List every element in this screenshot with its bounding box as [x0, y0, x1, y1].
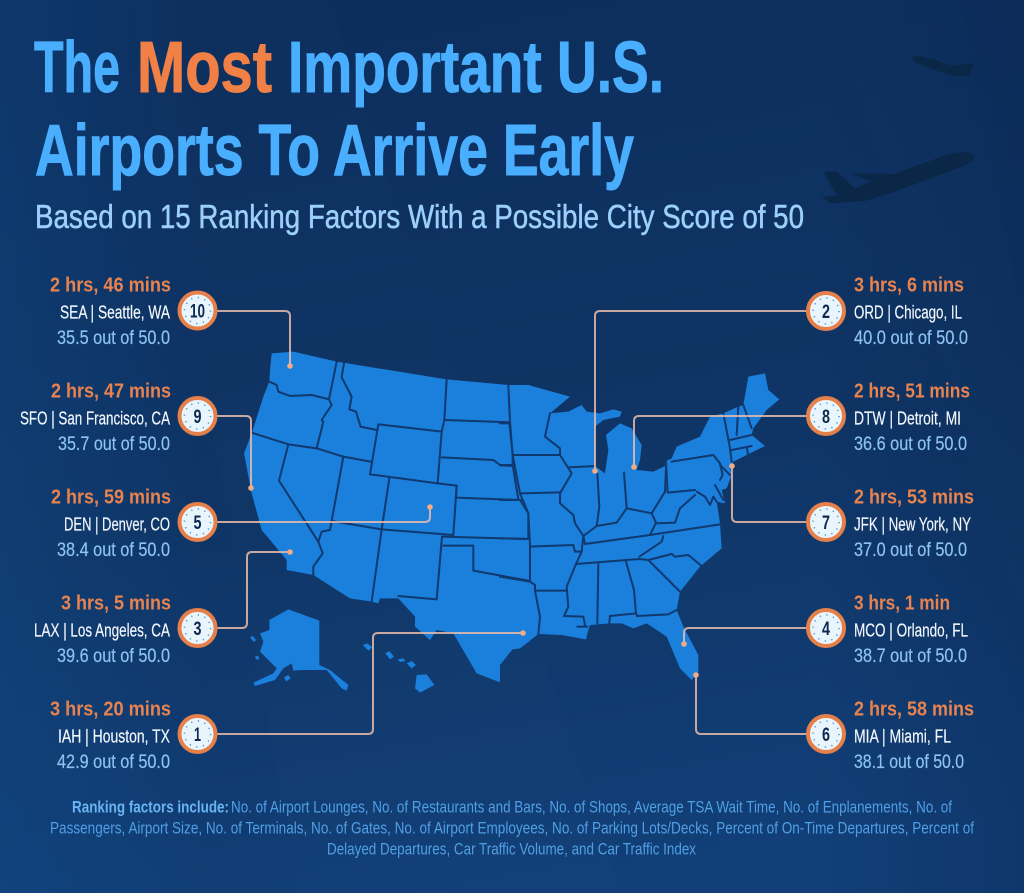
- callout: rank 2 Chicago: [592, 274, 968, 474]
- callout: rank 4 Orlando: 3 hrs, 1 min: [854, 592, 950, 614]
- callout: rank 6 Miami: MIA | Miami, FL: [854, 726, 951, 746]
- callout: rank 8 Detroit: DTW | Detroit, MI: [854, 408, 961, 428]
- callout: rank 8 Detroit: 2 hrs, 51 mins: [854, 380, 970, 402]
- callout: rank 4 Orlando: [681, 592, 968, 667]
- callout: rank 6 Miami: [693, 672, 974, 773]
- callout: rank 1 Houston: 42.9 out of 50.0: [57, 752, 170, 773]
- callout: rank 6 Miami: 2 hrs, 58 mins: [854, 698, 974, 720]
- callout: rank 1 Houston: 1: [194, 725, 201, 746]
- callout: rank 9 San Francisco: 2 hrs, 47 mins: [51, 380, 171, 402]
- callout: rank 8 Detroit: [631, 380, 970, 470]
- callout: rank 7 New York: 37.0 out of 50.0: [854, 540, 967, 561]
- callout: rank 1 Houston: [50, 630, 526, 773]
- title: Important U.S.: [288, 28, 664, 108]
- callout: rank 9 San Francisco: 35.7 out of 50.0: [58, 434, 170, 455]
- footer: ranking factors note: [50, 798, 974, 858]
- callout: rank 4 Orlando: 38.7 out of 50.0: [854, 646, 967, 667]
- callout: rank 10 Seattle: 35.5 out of 50.0: [57, 328, 170, 349]
- callout: rank 7 New York: [729, 463, 974, 561]
- callout: rank 5 Denver: DEN | Denver, CO: [64, 514, 170, 534]
- callout: rank 3 Los Angeles: LAX | Los Angeles, CA: [34, 620, 170, 640]
- callout: rank 10 Seattle: SEA | Seattle, WA: [60, 302, 170, 322]
- callout: rank 3 Los Angeles: 3: [194, 619, 202, 640]
- hawaii: [363, 643, 434, 693]
- callout: rank 5 Denver: [51, 486, 433, 561]
- title: Airports To Arrive Early: [35, 111, 634, 191]
- callout: rank 4 Orlando: MCO | Orlando, FL: [854, 620, 968, 640]
- callout: rank 3 Los Angeles: [34, 549, 293, 667]
- callout: rank 5 Denver: 2 hrs, 59 mins: [51, 486, 171, 508]
- icon: small airplane silhouette: [912, 56, 974, 76]
- callout: rank 2 Chicago: ORD | Chicago, IL: [854, 302, 962, 322]
- subtitle: Based on 15 Ranking Factors With a Possible City Score of 50: [35, 198, 804, 235]
- callout: rank 4 Orlando: 4: [822, 619, 830, 640]
- title: [34, 28, 664, 191]
- callout: rank 3 Los Angeles: 39.6 out of 50.0: [57, 646, 170, 667]
- alaska: [250, 609, 348, 691]
- footer: ranking factors note: Ranking factors include:: [72, 798, 229, 816]
- callout: rank 2 Chicago: 40.0 out of 50.0: [854, 328, 968, 349]
- callout: rank 1 Houston: IAH | Houston, TX: [58, 726, 170, 746]
- callout: rank 10 Seattle: [50, 274, 293, 369]
- callout: rank 7 New York: 2 hrs, 53 mins: [854, 486, 974, 508]
- callout: rank 6 Miami: 38.1 out of 50.0: [854, 752, 964, 773]
- callout: rank 9 San Francisco: SFO | San Francisco, CA: [20, 408, 170, 428]
- callout: rank 2 Chicago: 2: [822, 302, 830, 323]
- title: The: [34, 28, 120, 108]
- callout: rank 10 Seattle: 10: [190, 302, 205, 322]
- callout: rank 6 Miami: 6: [822, 725, 830, 746]
- callout: rank 7 New York: JFK | New York, NY: [854, 514, 971, 534]
- callout: rank 9 San Francisco: [20, 380, 254, 491]
- callout: rank 2 Chicago: 3 hrs, 6 mins: [854, 274, 964, 296]
- callout: rank 1 Houston: 3 hrs, 20 mins: [50, 698, 171, 720]
- callout: rank 3 Los Angeles: 3 hrs, 5 mins: [61, 592, 171, 614]
- callout: rank 7 New York: 7: [822, 513, 830, 534]
- title: Most: [137, 28, 272, 108]
- callout: rank 10 Seattle: 2 hrs, 46 mins: [50, 274, 171, 296]
- callout: rank 8 Detroit: 8: [822, 407, 830, 428]
- callout: rank 9 San Francisco: 9: [194, 407, 202, 428]
- map of the United States: [244, 352, 779, 693]
- callout: rank 8 Detroit: 36.6 out of 50.0: [854, 434, 967, 455]
- callout: rank 5 Denver: 5: [194, 513, 202, 534]
- icon: large airplane silhouette: [822, 152, 975, 203]
- footer: ranking factors note: Delayed Departures, Car Traffic Volume, and Car Traffic Index: [327, 840, 697, 858]
- callout: rank 5 Denver: 38.4 out of 50.0: [57, 540, 170, 561]
